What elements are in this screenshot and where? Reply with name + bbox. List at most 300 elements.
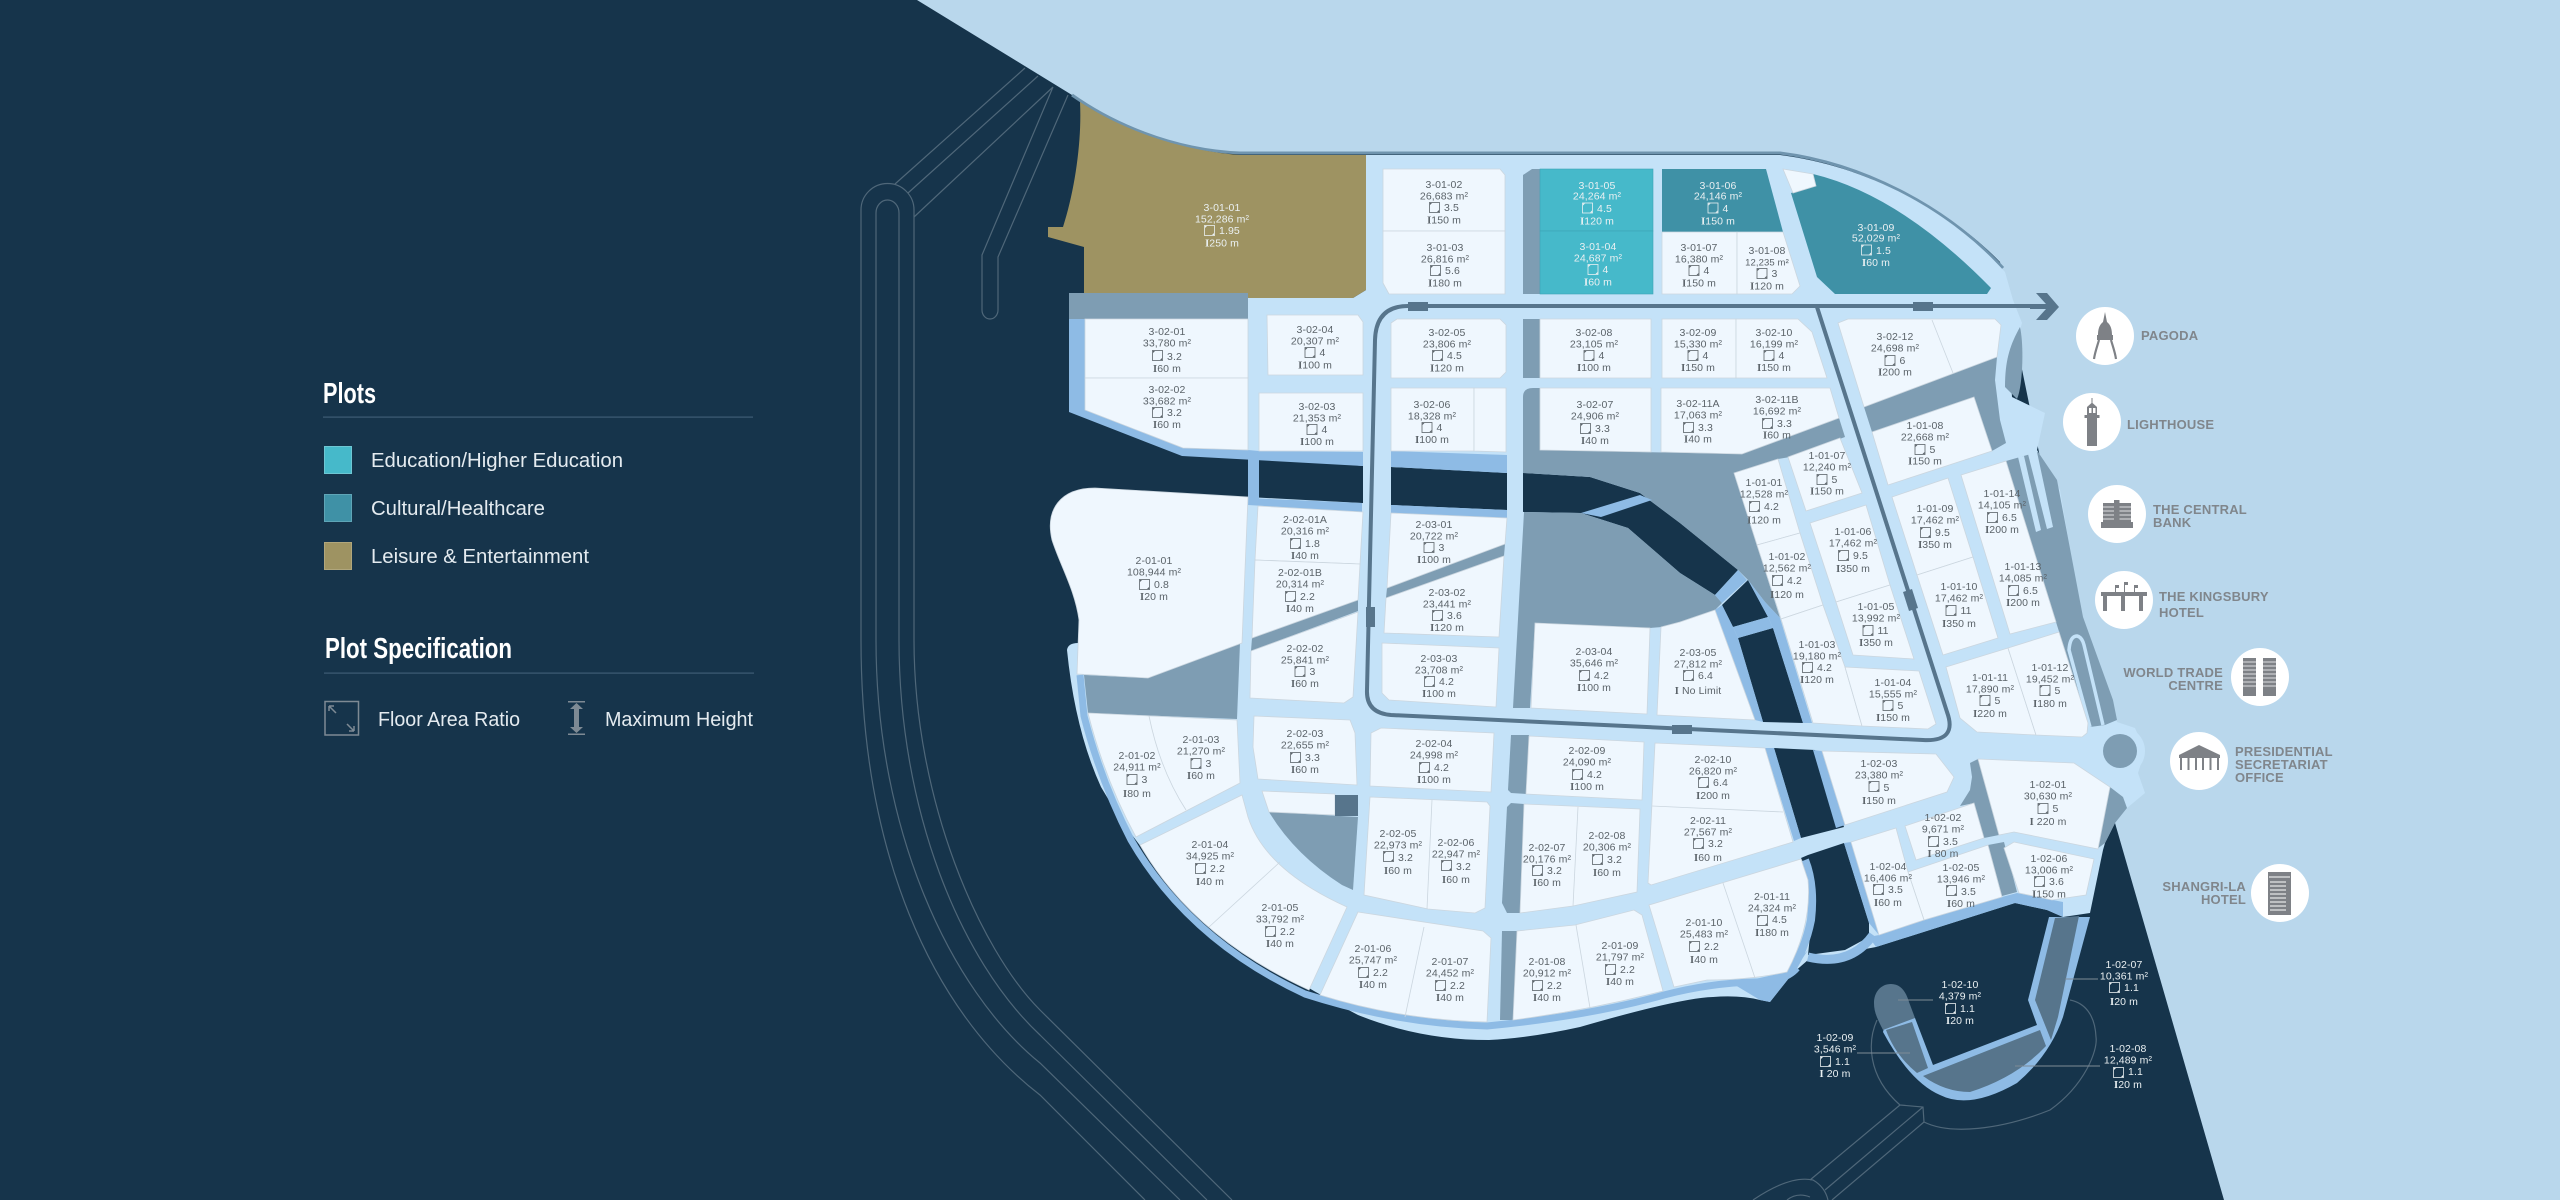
- 3-02-10: [1750, 327, 1798, 374]
- 2-01-11: [1748, 891, 1796, 939]
- 2-02-03: [1281, 728, 1329, 776]
- 2-01-08: [1523, 956, 1571, 1004]
- icon: maximum height: [568, 701, 585, 735]
- 3-01-01: 3-01-01: [1204, 202, 1240, 214]
- 3-02-04: 4: [1320, 347, 1326, 359]
- 2-03-03: 4.2: [1439, 676, 1454, 688]
- 3-02-02: I60 m: [1153, 419, 1181, 431]
- 2-03-03: I100 m: [1422, 688, 1456, 700]
- 3-01-07: I150 m: [1682, 278, 1716, 290]
- 2-02-09: 4.2: [1587, 769, 1602, 781]
- 3-02-12: I200 m: [1878, 366, 1912, 378]
- 2-02-07: 3.2: [1547, 865, 1562, 877]
- 1-02-08: 12,489 m²: [2104, 1054, 2152, 1066]
- 2-02-07: [1523, 842, 1571, 889]
- 1-02-07: I20 m: [2110, 996, 2138, 1008]
- 1-02-07: 1.1: [2124, 982, 2139, 994]
- 2-01-08: 2-01-08: [1529, 956, 1565, 968]
- 1-01-13: I200 m: [2006, 597, 2040, 609]
- 1-01-11: 5: [1994, 695, 2000, 707]
- 1-01-14: I200 m: [1985, 524, 2019, 536]
- 3-02-08: 23,105 m²: [1570, 338, 1618, 350]
- 1-01-05: 1-01-05: [1858, 601, 1894, 613]
- 1-02-06: I150 m: [2032, 888, 2066, 900]
- 2-02-08: 2-02-08: [1589, 830, 1625, 842]
- 2-02-05: 22,973 m²: [1374, 839, 1422, 851]
- 1-02-05: 13,946 m²: [1937, 873, 1985, 885]
- label: floor area ratio: Floor Area Ratio: [378, 708, 520, 731]
- 2-03-03: 2-03-03: [1421, 653, 1457, 665]
- 3-02-06: [1408, 399, 1456, 446]
- 3-02-07: 24,906 m²: [1571, 410, 1619, 422]
- 1-01-14: 1-01-14: [1984, 488, 2020, 500]
- landmark: shangri-la hotel: HOTEL: [2201, 892, 2246, 907]
- canals: [1248, 456, 1869, 955]
- 1-02-08: 1.1: [2128, 1066, 2143, 1078]
- landmark: presidential secretariat office: PRESIDENTIAL: [2235, 744, 2333, 759]
- 2-02-04: 4.2: [1434, 762, 1449, 774]
- 3-01-04: I60 m: [1584, 276, 1612, 288]
- 3-02-04: I100 m: [1298, 360, 1332, 372]
- 2-01-04: 2.2: [1210, 863, 1225, 875]
- 3-01-05: 4.5: [1597, 203, 1612, 215]
- 1-01-06: 9.5: [1853, 550, 1868, 562]
- 2-02-02: 25,841 m²: [1281, 654, 1329, 666]
- 3-01-02: 3-01-02: [1426, 179, 1462, 191]
- 3-02-03: 21,353 m²: [1293, 412, 1341, 424]
- 2-01-09: 2.2: [1620, 964, 1635, 976]
- 1-01-13: [1999, 561, 2047, 609]
- 3-02-09: I150 m: [1681, 362, 1715, 374]
- 1-01-02: I120 m: [1770, 589, 1804, 601]
- landmark: presidential secretariat office: SECRETARIAT: [2235, 757, 2328, 772]
- 2-01-10: I40 m: [1690, 954, 1718, 966]
- 3-01-04: 3-01-04: [1580, 241, 1616, 253]
- 1-01-10: [1935, 581, 1983, 630]
- 2-01-07: 24,452 m²: [1426, 967, 1474, 979]
- 3-02-10: 3-02-10: [1756, 327, 1792, 339]
- 1-01-14: 14,105 m²: [1978, 499, 2026, 511]
- 2-01-01: 0.8: [1154, 579, 1169, 591]
- label: cultural: Cultural/Healthcare: [371, 497, 545, 520]
- 2-02-01B: 2.2: [1300, 591, 1315, 603]
- 2-02-06: [1432, 837, 1480, 886]
- 2-02-01A: [1281, 514, 1329, 562]
- 3-01-08: I120 m: [1750, 280, 1784, 292]
- 2-02-01A: 1.8: [1305, 538, 1320, 550]
- 2-02-02: [1281, 643, 1329, 690]
- 2-01-03: 21,270 m²: [1177, 745, 1225, 757]
- 3-01-02: 3.5: [1444, 202, 1459, 214]
- 2-01-07: I40 m: [1436, 992, 1464, 1004]
- 2-01-02: I80 m: [1123, 788, 1151, 800]
- 3-01-06: I150 m: [1701, 216, 1735, 228]
- 2-02-08: I60 m: [1593, 867, 1621, 879]
- 2-03-05: 27,812 m²: [1674, 658, 1722, 670]
- 1-02-10: [1939, 979, 1982, 1027]
- 1-02-08: 1-02-08: [2110, 1043, 2146, 1055]
- 1-02-04: I60 m: [1874, 897, 1902, 909]
- 2-01-03: [1177, 734, 1225, 782]
- landmark: central bank: [2088, 485, 2247, 543]
- label: education: Education/Higher Education: [371, 449, 623, 472]
- landmark: kingsbury hotel: THE KINGSBURY: [2159, 589, 2269, 604]
- 2-01-07: 2.2: [1450, 980, 1465, 992]
- 3-02-11A: 17,063 m²: [1674, 409, 1722, 421]
- 2-03-01: 2-03-01: [1416, 519, 1452, 531]
- 3-01-03: [1421, 242, 1469, 290]
- 3-02-06: 4: [1436, 422, 1442, 434]
- 2-03-05: 6.4: [1698, 670, 1713, 682]
- 1-01-08: I150 m: [1908, 456, 1942, 468]
- 2-03-01: 3: [1438, 542, 1444, 554]
- 2-03-02: 23,441 m²: [1423, 598, 1471, 610]
- 2-02-04: 24,998 m²: [1410, 749, 1458, 761]
- 1-01-13: 1-01-13: [2005, 561, 2041, 573]
- 3-02-11B: 3.3: [1777, 418, 1792, 430]
- 2-03-04: [1570, 646, 1618, 694]
- 2-01-05: 33,792 m²: [1256, 913, 1304, 925]
- 3-02-07: 3-02-07: [1577, 399, 1613, 411]
- 2-02-02: 2-02-02: [1287, 643, 1323, 655]
- 3-01-09: 52,029 m²: [1852, 232, 1900, 244]
- landmark: shangri-la hotel: SHANGRI-LA: [2162, 879, 2246, 894]
- legend panel: [323, 378, 754, 735]
- 1-02-01: I 220 m: [2030, 816, 2067, 828]
- 2-02-03: 22,655 m²: [1281, 739, 1329, 751]
- 1-01-12: 1-01-12: [2032, 662, 2068, 674]
- 2-01-04: I40 m: [1196, 876, 1224, 888]
- 3-02-12: 3-02-12: [1877, 331, 1913, 343]
- 2-02-01A: I40 m: [1291, 550, 1319, 562]
- 1-02-08: [2104, 1043, 2152, 1091]
- land and roads base: [1050, 155, 2145, 1040]
- 2-03-05: [1674, 647, 1722, 697]
- 1-02-05: [1937, 862, 1985, 910]
- 3-01-04: 24,687 m²: [1574, 252, 1622, 264]
- 1-01-01: 12,528 m²: [1740, 488, 1788, 500]
- 1-01-11: I220 m: [1973, 708, 2007, 720]
- 1-02-09: 1.1: [1835, 1056, 1850, 1068]
- 2-01-09: 21,797 m²: [1596, 951, 1644, 963]
- 3-01-02: [1420, 179, 1468, 226]
- 2-02-04: [1410, 738, 1458, 786]
- 1-02-10: 1-02-10: [1942, 979, 1978, 991]
- 1-01-04: I150 m: [1876, 712, 1910, 724]
- 2-03-02: 2-03-02: [1429, 587, 1465, 599]
- 2-02-01A: 20,316 m²: [1281, 525, 1329, 537]
- 1-02-09: 3,546 m²: [1814, 1043, 1857, 1055]
- 2-01-11: I180 m: [1755, 927, 1789, 939]
- 3-02-11A: 3-02-11A: [1676, 398, 1720, 410]
- 2-01-02: 3: [1142, 774, 1148, 786]
- 2-02-11: I60 m: [1694, 852, 1722, 864]
- 1-01-07: 5: [1832, 474, 1838, 486]
- 2-02-10: 2-02-10: [1695, 754, 1731, 766]
- plot: 3-01-01 leisure: [1048, 102, 1366, 298]
- 3-01-06: [1694, 180, 1742, 228]
- 2-01-04: 2-01-04: [1192, 839, 1228, 851]
- 1-02-05: I60 m: [1947, 898, 1975, 910]
- 2-02-01B: [1276, 567, 1324, 615]
- 1-01-09: [1911, 503, 1959, 551]
- 3-02-10: 4: [1778, 350, 1784, 362]
- 3-02-08: 3-02-08: [1576, 327, 1612, 339]
- 3-02-03: 4: [1322, 424, 1328, 436]
- 2-02-11: 2-02-11: [1690, 815, 1726, 827]
- 2-01-07: [1426, 956, 1474, 1004]
- 3-02-05: 23,806 m²: [1423, 338, 1471, 350]
- 1-02-03: 5: [1884, 782, 1890, 794]
- 3-01-03: I180 m: [1428, 278, 1462, 290]
- 2-03-03: [1415, 653, 1463, 700]
- landmark: lighthouse: [2063, 393, 2214, 451]
- 2-01-06: 25,747 m²: [1349, 954, 1397, 966]
- decorative road outlines on water: [861, 68, 2096, 1200]
- 3-02-11A: [1674, 398, 1722, 446]
- 3-01-04: 4: [1602, 264, 1608, 276]
- 2-01-06: 2.2: [1373, 967, 1388, 979]
- 1-01-06: I350 m: [1836, 563, 1870, 575]
- dark slate square: [1335, 795, 1358, 816]
- 2-01-01: I20 m: [1140, 591, 1168, 603]
- 3-02-07: I40 m: [1581, 435, 1609, 447]
- 1-01-11: 1-01-11: [1972, 672, 2008, 684]
- 1-02-10: I20 m: [1946, 1015, 1974, 1027]
- 3-01-09: [1852, 222, 1900, 269]
- 1-02-04: 1-02-04: [1870, 861, 1906, 873]
- 1-02-05: 1-02-05: [1943, 862, 1979, 874]
- 3-02-06: I100 m: [1415, 434, 1449, 446]
- 2-01-09: I40 m: [1606, 976, 1634, 988]
- coast edge: [1072, 95, 2003, 268]
- 2-03-05: 2-03-05: [1680, 647, 1716, 659]
- 1-01-04: 1-01-04: [1875, 677, 1911, 689]
- green open spaces: [1069, 169, 2137, 1020]
- 3-02-01: 33,780 m²: [1143, 337, 1191, 349]
- 2-02-11: [1684, 815, 1732, 864]
- 3-02-12: 24,698 m²: [1871, 342, 1919, 354]
- 1-02-03: I150 m: [1862, 795, 1896, 807]
- 3-02-03: [1293, 401, 1341, 448]
- landmark: presidential secretariat office: [2170, 732, 2333, 790]
- 3-02-12: [1871, 331, 1919, 378]
- 1-02-03: 23,380 m²: [1855, 769, 1903, 781]
- swatch: education: [324, 446, 352, 474]
- plot labels light group: [1195, 180, 2152, 1091]
- 3-01-02: 26,683 m²: [1420, 190, 1468, 202]
- 1-01-09: 9.5: [1935, 527, 1950, 539]
- 1-01-06: 1-01-06: [1835, 526, 1871, 538]
- 3-02-11B: I60 m: [1763, 430, 1791, 442]
- 2-01-09: 2-01-09: [1602, 940, 1638, 952]
- 1-02-03: [1855, 758, 1903, 807]
- 1-01-11: [1966, 672, 2014, 720]
- 2-02-02: I60 m: [1291, 678, 1319, 690]
- 2-01-10: 25,483 m²: [1680, 928, 1728, 940]
- 1-01-14: 6.5: [2002, 512, 2017, 524]
- landmark: world trade centre: [2123, 648, 2289, 706]
- 1-02-02: I 80 m: [1928, 848, 1959, 860]
- 2-03-04: 4.2: [1594, 670, 1609, 682]
- 1-01-03: I120 m: [1800, 674, 1834, 686]
- 1-02-02: 1-02-02: [1925, 812, 1961, 824]
- peninsula 1-02-07 to 1-02-10: [1874, 916, 2090, 1100]
- 2-02-06: 2-02-06: [1438, 837, 1474, 849]
- 2-01-04: [1186, 839, 1234, 888]
- 1-01-05: 11: [1878, 625, 1889, 637]
- 3-02-01: 3.2: [1167, 351, 1182, 363]
- sea: [917, 0, 2560, 1200]
- 3-02-05: 4.5: [1447, 350, 1462, 362]
- 3-02-02: 3-02-02: [1149, 384, 1185, 396]
- 1-01-03: 19,180 m²: [1793, 650, 1841, 662]
- 3-02-01: I60 m: [1153, 363, 1181, 375]
- callout lines: [1857, 979, 2100, 1066]
- 3-01-08: [1745, 245, 1789, 292]
- 2-02-05: I60 m: [1384, 865, 1412, 877]
- 3-02-02: [1143, 384, 1191, 431]
- 2-03-02: I120 m: [1430, 622, 1464, 634]
- 2-01-09: [1596, 940, 1644, 988]
- 1-01-02: [1763, 551, 1811, 601]
- 2-01-05: 2.2: [1280, 926, 1295, 938]
- 3-01-09: 1.5: [1876, 245, 1891, 257]
- 1-02-09: I 20 m: [1820, 1068, 1851, 1080]
- 2-01-03: I60 m: [1187, 770, 1215, 782]
- 3-01-08: 3-01-08: [1749, 245, 1785, 257]
- 3-01-07: [1675, 242, 1723, 290]
- 2-02-11: 27,567 m²: [1684, 826, 1732, 838]
- 3-01-07: 16,380 m²: [1675, 253, 1723, 265]
- 1-01-01: I120 m: [1747, 514, 1781, 526]
- 1-02-03: 1-02-03: [1861, 758, 1897, 770]
- 3-01-05: I120 m: [1580, 216, 1614, 228]
- 1-01-01: [1740, 477, 1788, 526]
- landmark: pagoda: PAGODA: [2141, 328, 2199, 343]
- 2-02-10: I200 m: [1696, 790, 1730, 802]
- 2-02-09: 2-02-09: [1569, 745, 1605, 757]
- 1-01-06: [1829, 526, 1877, 575]
- 1-01-07: I150 m: [1810, 486, 1844, 498]
- 2-02-10: 6.4: [1713, 777, 1728, 789]
- 2-03-01: 20,722 m²: [1410, 530, 1458, 542]
- 2-02-10: [1689, 754, 1737, 802]
- 1-01-04: [1869, 677, 1917, 724]
- 1-01-07: 1-01-07: [1809, 450, 1845, 462]
- 1-01-12: I180 m: [2033, 698, 2067, 710]
- rail loop: [1366, 302, 2035, 740]
- 2-02-03: 2-02-03: [1287, 728, 1323, 740]
- 1-01-13: 14,085 m²: [1999, 572, 2047, 584]
- 2-01-11: 24,324 m²: [1748, 902, 1796, 914]
- 1-01-09: 17,462 m²: [1911, 514, 1959, 526]
- 3-02-03: 3-02-03: [1299, 401, 1335, 413]
- 3-02-09: 4: [1702, 350, 1708, 362]
- 3-01-03: 3-01-03: [1427, 242, 1463, 254]
- 2-02-09: 24,090 m²: [1563, 756, 1611, 768]
- 3-01-01: [1195, 202, 1249, 250]
- 3-01-01: I250 m: [1205, 238, 1239, 250]
- landmark: central bank: THE CENTRAL: [2153, 502, 2247, 517]
- 1-01-05: 13,992 m²: [1852, 612, 1900, 624]
- 1-02-04: 16,406 m²: [1864, 872, 1912, 884]
- 3-02-08: I100 m: [1577, 362, 1611, 374]
- 1-01-04: 5: [1898, 700, 1904, 712]
- 3-02-09: 15,330 m²: [1674, 338, 1722, 350]
- 1-01-12: [2026, 662, 2074, 710]
- 1-01-03: [1793, 639, 1841, 686]
- 2-01-02: 2-01-02: [1119, 750, 1155, 762]
- landmark: shangri-la hotel: [2162, 864, 2309, 922]
- 2-01-08: 20,912 m²: [1523, 967, 1571, 979]
- 1-02-01: 5: [2052, 803, 2058, 815]
- swatch: leisure: [324, 542, 352, 570]
- 3-02-11A: 3.3: [1698, 422, 1713, 434]
- landmark: presidential secretariat office: OFFICE: [2235, 770, 2284, 785]
- 3-01-03: 26,816 m²: [1421, 253, 1469, 265]
- 1-01-08: 5: [1930, 444, 1936, 456]
- 1-01-04: 15,555 m²: [1869, 688, 1917, 700]
- 3-01-08: 3: [1772, 268, 1778, 280]
- label: maximum height: Maximum Height: [605, 708, 753, 731]
- 2-01-10: [1680, 917, 1728, 966]
- 3-02-03: I100 m: [1300, 436, 1334, 448]
- 2-02-10: 26,820 m²: [1689, 765, 1737, 777]
- 1-01-02: 1-01-02: [1769, 551, 1805, 563]
- 2-02-01B: 20,314 m²: [1276, 578, 1324, 590]
- 1-01-10: 17,462 m²: [1935, 592, 1983, 604]
- 3-02-08: [1570, 327, 1618, 374]
- 1-02-09: [1814, 1032, 1857, 1080]
- 2-01-06: 2-01-06: [1355, 943, 1391, 955]
- 3-01-05: 3-01-05: [1579, 180, 1615, 192]
- 2-02-08: 20,306 m²: [1583, 841, 1631, 853]
- plots: cultural: [1662, 169, 1991, 294]
- arrow: [2030, 293, 2059, 320]
- 2-02-01B: 2-02-01B: [1278, 567, 1322, 579]
- 1-01-02: 12,562 m²: [1763, 562, 1811, 574]
- 3-01-07: 3-01-07: [1681, 242, 1717, 254]
- 3-02-11B: [1753, 394, 1801, 442]
- 3-01-06: 24,146 m²: [1694, 190, 1742, 202]
- 3-02-07: 3.3: [1595, 423, 1610, 435]
- 1-02-01: [2024, 779, 2072, 828]
- 2-01-08: 2.2: [1547, 980, 1562, 992]
- 1-02-07: [2100, 959, 2148, 1008]
- 2-01-06: [1349, 943, 1397, 991]
- 2-03-02: [1423, 587, 1471, 634]
- 3-02-05: [1423, 327, 1471, 374]
- 2-01-05: [1256, 902, 1304, 950]
- plots: education: [1540, 169, 1653, 294]
- 3-02-02: 3.2: [1167, 407, 1182, 419]
- 2-01-01: 108,944 m²: [1127, 566, 1181, 578]
- 2-01-05: I40 m: [1266, 938, 1294, 950]
- 2-02-08: 3.2: [1607, 854, 1622, 866]
- 2-01-03: 3: [1206, 758, 1212, 770]
- 3-02-12: 6: [1900, 355, 1906, 367]
- 3-02-07: [1571, 399, 1619, 447]
- 2-02-09: I100 m: [1570, 781, 1604, 793]
- 2-01-10: 2-01-10: [1686, 917, 1722, 929]
- 2-03-05: I No Limit: [1675, 685, 1721, 697]
- 3-02-05: I120 m: [1430, 362, 1464, 374]
- 1-01-11: 17,890 m²: [1966, 683, 2014, 695]
- 2-03-02: 3.6: [1447, 610, 1462, 622]
- 1-01-06: 17,462 m²: [1829, 537, 1877, 549]
- 3-02-09: [1674, 327, 1722, 374]
